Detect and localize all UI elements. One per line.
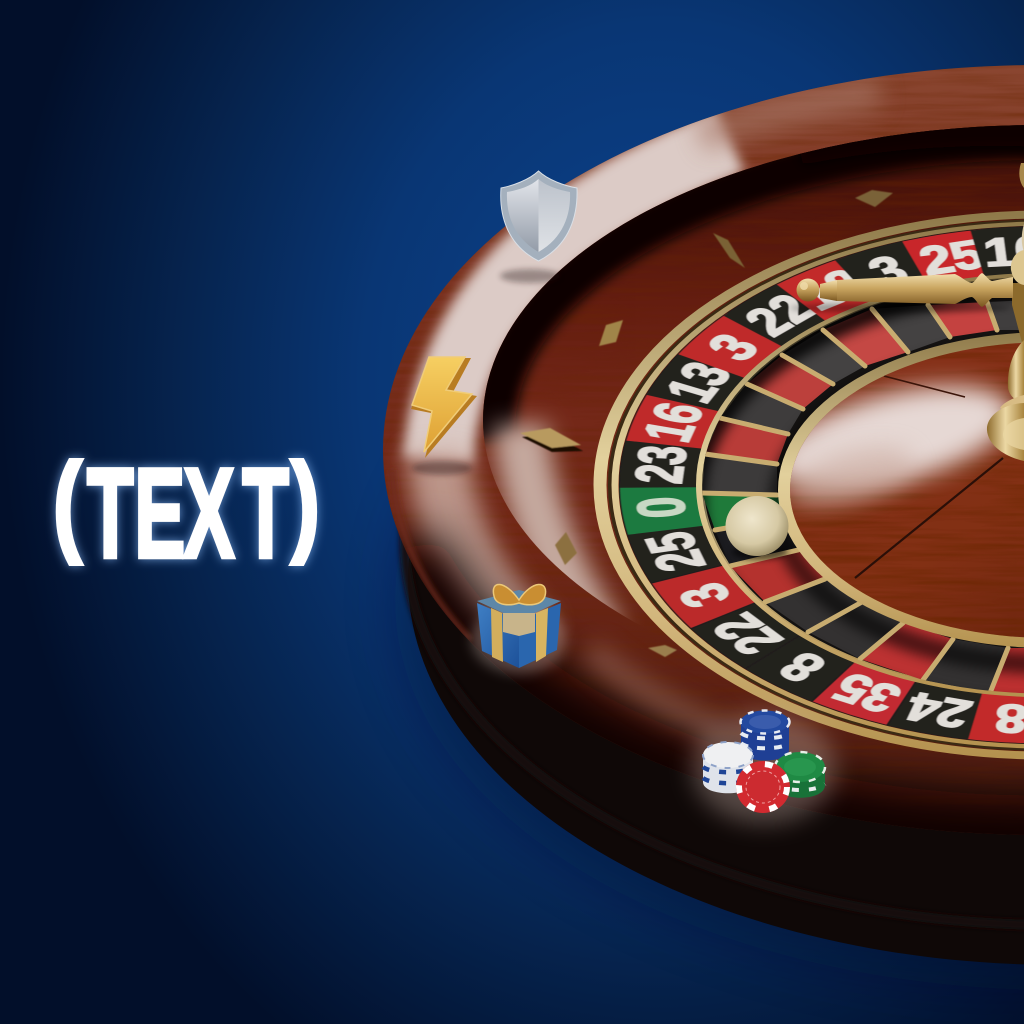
icon: lightning bolt [411,357,477,475]
hub sheen [790,367,1014,508]
wheel base side [405,155,1024,965]
hub seams [855,458,1003,578]
tile 23: 23 [622,444,701,485]
tile 3 upper: 3 [694,326,772,368]
pockets [695,286,1024,712]
icon: shield [500,171,577,283]
tile 13: 13 [652,356,745,409]
tile 8 lower [745,633,859,702]
tile 3 lower: 3 [665,576,745,614]
spindle [987,163,1024,461]
table shadow [395,210,1024,990]
tile 8 lower: 8 [767,644,838,691]
gift bow [493,584,546,605]
title text: ) [291,442,320,566]
tile 25 top: 25 [913,231,991,284]
title text: ( [53,442,83,566]
wheel [380,60,1024,990]
white chip stack [703,742,753,793]
tile 3 upper [677,313,789,382]
pocket shadows [695,286,1024,712]
icon: gift box [471,584,567,674]
tile 22 lower: 22 [699,605,796,663]
frets [702,302,1008,693]
green chip stack [775,752,825,798]
tile 22 upper: 22 [732,286,828,344]
tile 24: 24 [898,683,979,737]
tile 18: 18 [786,261,879,319]
tile 3 lower [650,562,759,629]
number track [600,214,1024,756]
tile 35: 35 [823,664,912,721]
tile 16: 16 [630,398,717,447]
centre hub [764,332,1024,648]
icon: casino chips [692,710,836,824]
red chip [736,761,790,813]
title text: TEXT [87,443,289,585]
bowl diamonds [520,190,893,657]
inner bowl [483,125,1024,730]
tile 25 lower: 25 [631,527,720,576]
ball-track arm [790,273,1013,313]
tile 3 top [834,239,942,303]
tile 0 [618,480,704,535]
wooden outer rim [380,60,1024,840]
tile 3 top: 3 [859,247,918,295]
tile 0: 0 [623,495,700,520]
tile 8 [967,693,1024,745]
ivory ball [726,496,788,560]
blue chip stack [740,710,790,760]
